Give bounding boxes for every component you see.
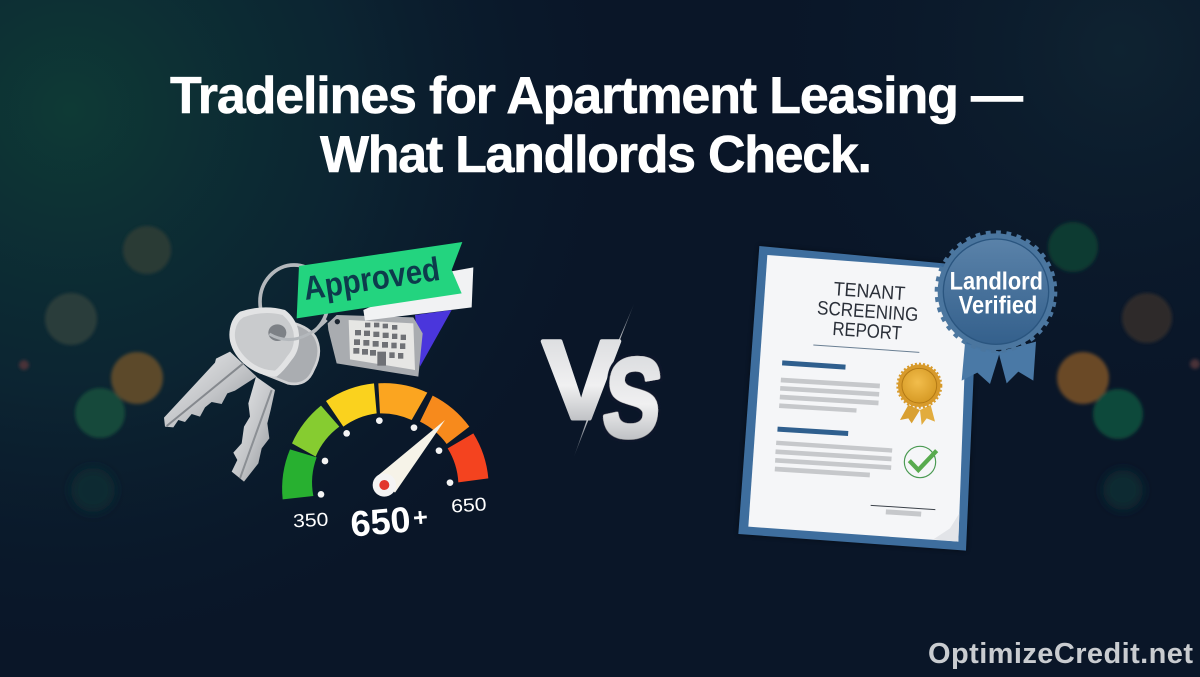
title: Tradelines for Apartment Leasing — [170, 67, 1023, 125]
report heading: REPORT [832, 319, 903, 345]
icon: building key tag [328, 315, 423, 377]
report heading: TENANT [833, 279, 906, 305]
signature line [871, 505, 935, 510]
title: What Landlords Check. [320, 126, 872, 184]
landlord verified seal: Verified [959, 293, 1037, 320]
watermark: OptimizeCredit.net [928, 638, 1193, 670]
icon: green check [904, 446, 937, 478]
VS emblem [542, 302, 668, 461]
title [170, 67, 1023, 184]
report heading [816, 279, 919, 345]
landlord verified seal [938, 233, 1054, 384]
document frame [738, 246, 978, 551]
page curl [933, 513, 959, 542]
VS emblem: V [542, 316, 620, 442]
needle [373, 420, 445, 497]
document paper [748, 255, 968, 542]
icon: back key [232, 322, 319, 482]
right illustration: tenant screening report [738, 233, 1054, 551]
credit score gauge [282, 383, 488, 545]
report text section 2 [775, 427, 892, 477]
credit score gauge: + [412, 503, 429, 533]
report text section 1 [779, 360, 880, 413]
approved banner: Approved [301, 251, 442, 308]
bokeh lights [19, 222, 1200, 439]
landlord verified seal: Landlord [950, 268, 1043, 295]
icon: gold medal [898, 364, 941, 425]
credit score gauge: 650 [349, 499, 412, 545]
white paper strip [363, 267, 473, 321]
icon: front key [164, 307, 327, 427]
VS emblem: S [597, 335, 668, 461]
document shadow [738, 246, 978, 551]
left illustration: keys, approved tag and credit gauge [164, 242, 488, 545]
key ring [260, 265, 328, 338]
faint bokeh lights [71, 468, 1143, 512]
gauge labels: 350 [292, 509, 329, 531]
report heading: SCREENING [816, 298, 919, 326]
credit score gauge: 650 [450, 493, 487, 517]
icon: purple triangle [415, 310, 452, 367]
